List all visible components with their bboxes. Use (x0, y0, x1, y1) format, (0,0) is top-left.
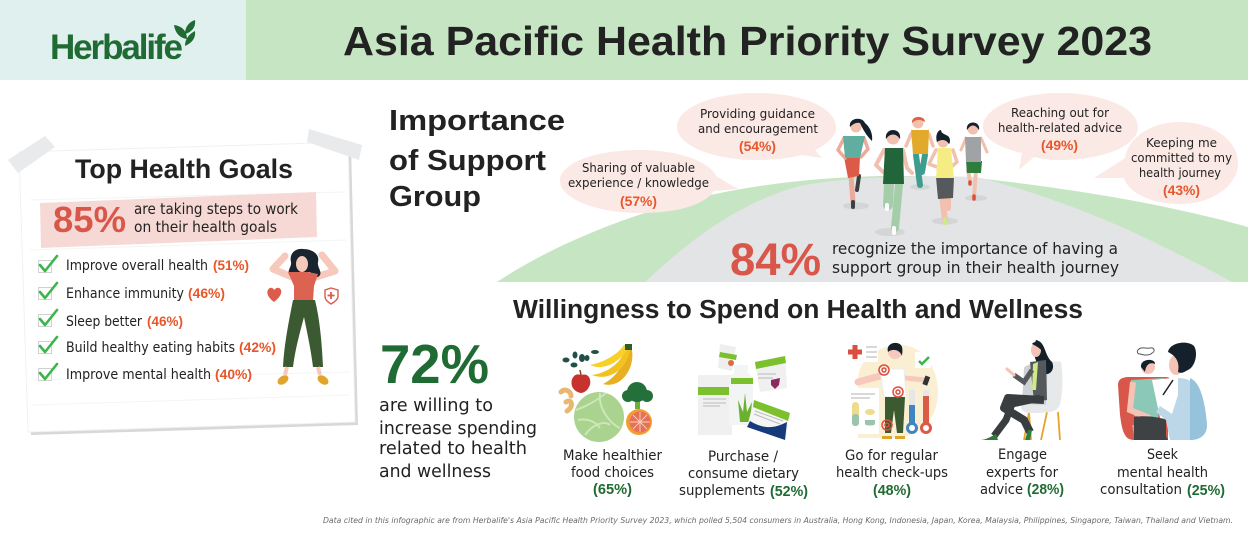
heading: importance of support group (389, 105, 565, 213)
item: engage experts (980, 340, 1064, 498)
speech bubble: keeping committed: (43%) (1163, 183, 1200, 198)
callout: 72%: increase spending (379, 418, 537, 439)
heading: importance of support group: Group (389, 181, 481, 213)
caption: dietary supplements: supplements (679, 483, 765, 499)
speech bubble: reaching out: health-related advice (998, 121, 1122, 135)
caption: food choices: Make healthier (563, 448, 662, 464)
caption: consultation (1100, 447, 1225, 499)
callout: 84%: support group in their health journey (832, 258, 1119, 277)
speech bubble: keeping committed (1094, 122, 1238, 204)
speech bubble: guidance: (54%) (739, 139, 776, 154)
speech bubble: sharing experience: (57%) (620, 194, 657, 209)
caption: consultation: Seek (1147, 447, 1179, 463)
hill and road (497, 176, 1248, 282)
checklist: Build healthy eating habits (66, 340, 235, 356)
caption: check-ups: Go for regular (845, 448, 938, 464)
caption: food choices: food choices (571, 465, 654, 481)
runner: teal shirt (838, 119, 872, 207)
caption: dietary supplements: (52%) (770, 484, 808, 500)
callout: 72%: related to health (379, 438, 527, 459)
footnote: Data cited in this infographic are from Herbalife's Asia Pacific Health Priority Survey 2023, which polled 5,504 consumers in Australia, Hong Kong, Indonesia, Japan, Korea, Malaysia, Philippines, Singapore, Taiwan, Thailand and Vietnam. (323, 516, 1233, 525)
caption: food choices (563, 448, 662, 498)
caption: check-ups (836, 448, 948, 499)
callout: 84%: recognize the importance of having a (832, 239, 1118, 258)
checklist: (46%) (188, 285, 225, 301)
checklist: Improve mental health (66, 367, 211, 383)
caption: consultation: consultation (1100, 482, 1182, 498)
caption: consultation: mental health (1117, 465, 1208, 481)
callout: 84%: 84% (730, 234, 821, 285)
callout: 72%: and wellness (379, 461, 491, 482)
runner: yellow shirt (906, 117, 933, 185)
caption: check-ups: (48%) (873, 483, 911, 499)
heading: top health goals: Top Health Goals (75, 154, 293, 184)
checklist: Improve overall health (66, 258, 208, 274)
icon: supplement packs (698, 344, 790, 440)
speech bubble: sharing experience: experience / knowledge (568, 176, 709, 190)
callout: 85%: 85% (53, 199, 126, 240)
caption: dietary supplements: Purchase / (708, 449, 778, 465)
logo: Herbalife: Herbalife (50, 28, 183, 67)
heading: willingness to spend: Willingness to Spend on Health and Wellness (513, 296, 1083, 324)
caption: check-ups: health check-ups (836, 465, 948, 481)
speech bubble: guidance: and encouragement (698, 122, 818, 136)
caption: experts: experts for (986, 465, 1058, 481)
checklist: Enhance immunity (66, 286, 184, 302)
icon: food (561, 344, 653, 442)
runner: grey shirt (961, 122, 987, 199)
title: Asia Pacific Health Priority Survey 2023 (343, 18, 1152, 64)
heading: importance of support group: Importance (389, 105, 565, 137)
heading: importance of support group: of Support (389, 145, 546, 177)
caption: dietary supplements: consume dietary (688, 466, 799, 482)
speech bubble: reaching out (983, 93, 1138, 170)
checklist: Sleep better (66, 314, 142, 330)
caption: food choices: (65%) (593, 482, 632, 498)
caption: experts: (28%) (1027, 482, 1064, 498)
checklist: (42%) (239, 339, 276, 355)
caption: experts: Engage (998, 447, 1047, 463)
speech bubble: guidance (677, 93, 836, 160)
caption: consultation: (25%) (1187, 483, 1225, 499)
callout: 84% (730, 234, 1119, 285)
header band (0, 0, 1248, 80)
callout: 85% (40, 192, 317, 248)
callout: 85%: on their health goals (134, 218, 277, 236)
speech bubble: sharing experience (560, 150, 738, 213)
caption: dietary supplements (679, 449, 808, 500)
callout: 72%: 72% (380, 333, 489, 395)
speech bubble: reaching out: (49%) (1041, 138, 1078, 153)
icon: health check man (848, 343, 938, 439)
callout: 85%: are taking steps to work (134, 200, 298, 218)
checklist: (46%) (147, 313, 183, 329)
panel: top health goals note (8, 129, 362, 435)
icon: counselling session (1118, 343, 1207, 440)
callout: 72%: are willing to (379, 395, 493, 416)
item: health check-ups (836, 343, 948, 499)
callout: 72% (379, 333, 537, 482)
item: mental health consultation (1100, 343, 1225, 499)
runners illustration (838, 117, 987, 236)
speech bubble: keeping committed: Keeping me (1146, 136, 1217, 150)
speech bubble: reaching out: Reaching out for (1011, 106, 1109, 120)
speech bubble: keeping committed: committed to my (1131, 151, 1232, 165)
checklist (38, 256, 276, 383)
checklist: (51%) (213, 257, 249, 273)
speech bubble: keeping committed: health journey (1139, 166, 1221, 180)
item: healthier food choices (561, 344, 662, 498)
icon: seated woman expert (980, 340, 1063, 440)
caption: experts (980, 447, 1064, 498)
runner: light yellow top (929, 130, 957, 223)
speech bubble: guidance: Providing guidance (700, 107, 815, 121)
runner: dark green top (876, 130, 912, 233)
caption: experts: advice (980, 482, 1023, 498)
icon: flexing woman (267, 249, 338, 387)
speech bubble: sharing experience: Sharing of valuable (582, 161, 695, 175)
item: dietary supplements (679, 344, 808, 500)
checklist: (40%) (215, 366, 252, 382)
